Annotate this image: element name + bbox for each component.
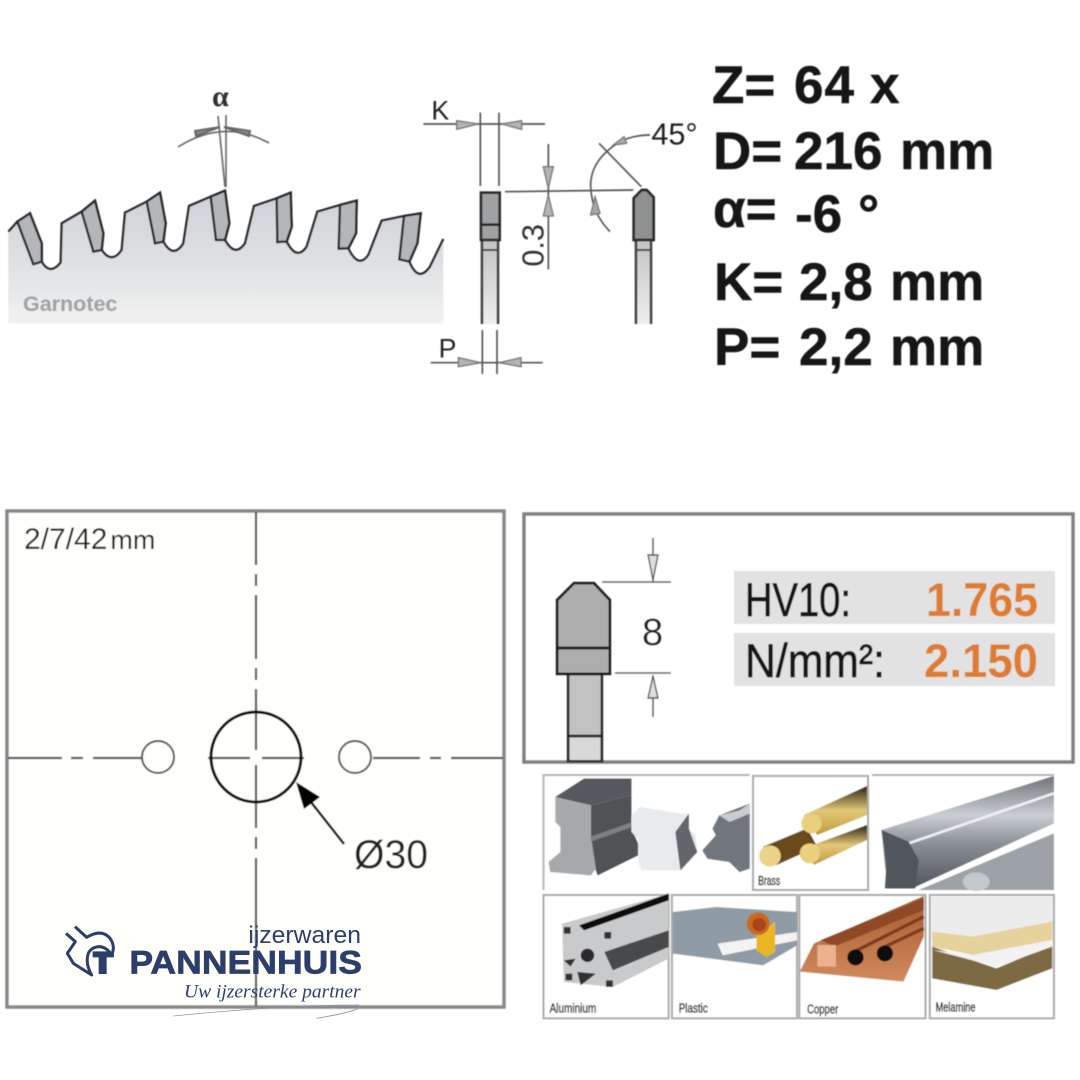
D spec: mm: [900, 122, 994, 181]
carbide tips: [17, 191, 421, 264]
logo word Pannenhuis: PANNENHUIS: [129, 944, 362, 981]
material: plastic: Plastic: [679, 1001, 708, 1016]
side view dimension drawing: [423, 95, 698, 374]
panel: hardness data: [524, 514, 1073, 762]
alpha spec: -6: [795, 185, 842, 244]
height dimension 8: 8: [642, 612, 663, 654]
alpha spec: α=: [713, 180, 777, 239]
row: N/mm2: 2.150: [924, 634, 1038, 687]
bore arrow: [296, 782, 344, 844]
brand label on blade: Garnotec: [23, 292, 117, 316]
K dimension: [423, 95, 545, 186]
logo tagline: Uw ijzersterke partner: [184, 982, 361, 1003]
K spec: mm: [890, 253, 984, 312]
centre lines: [8, 512, 503, 1006]
saw teeth profile drawing: [8, 191, 443, 323]
pin hole left: [142, 741, 174, 773]
material: brass: [753, 776, 868, 890]
centre bore: [211, 712, 301, 802]
material: brass: Brass: [758, 873, 780, 888]
0.3 dimension: [505, 144, 633, 269]
bore diameter label: Ø30: [354, 833, 428, 877]
height dimension 8: [602, 538, 671, 717]
material: aluminium extrusions: [544, 775, 750, 890]
K dimension: K: [431, 95, 449, 125]
logo icon: [66, 927, 114, 975]
pin hole right: [339, 741, 371, 773]
tooth side view with 45 degree chamfer: 45°: [651, 118, 698, 152]
material: melamine: [930, 895, 1054, 1018]
tooth side view with 45 degree chamfer: [591, 118, 698, 324]
tooth front view: [481, 193, 500, 324]
material: aluminium profile and bar: [872, 775, 1054, 891]
material: plastic: [672, 895, 797, 1018]
material: aluminium: Aluminium: [550, 1001, 596, 1016]
angle alpha dimension: [178, 80, 269, 187]
material: copper: Copper: [807, 1001, 839, 1016]
logo swoosh: [173, 1005, 360, 1018]
material: copper: [799, 895, 925, 1018]
row: HV10: 1.765: [926, 573, 1038, 626]
row: N/mm2: [734, 633, 1055, 687]
tooth tip drawing: [557, 583, 610, 761]
blade outline: [8, 191, 443, 274]
K spec: K=: [714, 253, 783, 312]
P dimension: P: [439, 333, 456, 363]
alpha spec: °: [858, 185, 879, 244]
material: melamine: Melamine: [936, 999, 975, 1014]
row: HV10: HV10:: [745, 573, 851, 626]
logo word ijzerwaren: ijzerwaren: [248, 922, 361, 949]
row: HV10: [734, 571, 1055, 626]
K spec: 2,8: [799, 253, 873, 312]
P spec: 2,2: [799, 318, 873, 377]
logo: ijzerwaren Pannenhuis: [66, 922, 362, 1018]
0.3 dimension: 0.3: [516, 224, 550, 267]
D spec: D=: [713, 122, 782, 181]
alpha symbol: α: [212, 80, 229, 113]
specification list: [712, 56, 994, 377]
materials photo grid: [544, 775, 1054, 1018]
Z spec: Z=: [712, 56, 775, 115]
blade body: [8, 191, 443, 323]
row: N/mm2: N/mm²:: [745, 634, 885, 687]
P spec: mm: [890, 318, 984, 377]
pin hole size label: 2/7/42mm: [24, 523, 155, 556]
P spec: P=: [714, 318, 780, 377]
material: aluminium: [544, 894, 669, 1018]
D spec: 216: [794, 122, 882, 181]
Z spec: x: [870, 56, 900, 115]
Z spec: 64: [794, 56, 855, 115]
P dimension: [431, 330, 543, 374]
panel: bore layout: [7, 511, 504, 1007]
